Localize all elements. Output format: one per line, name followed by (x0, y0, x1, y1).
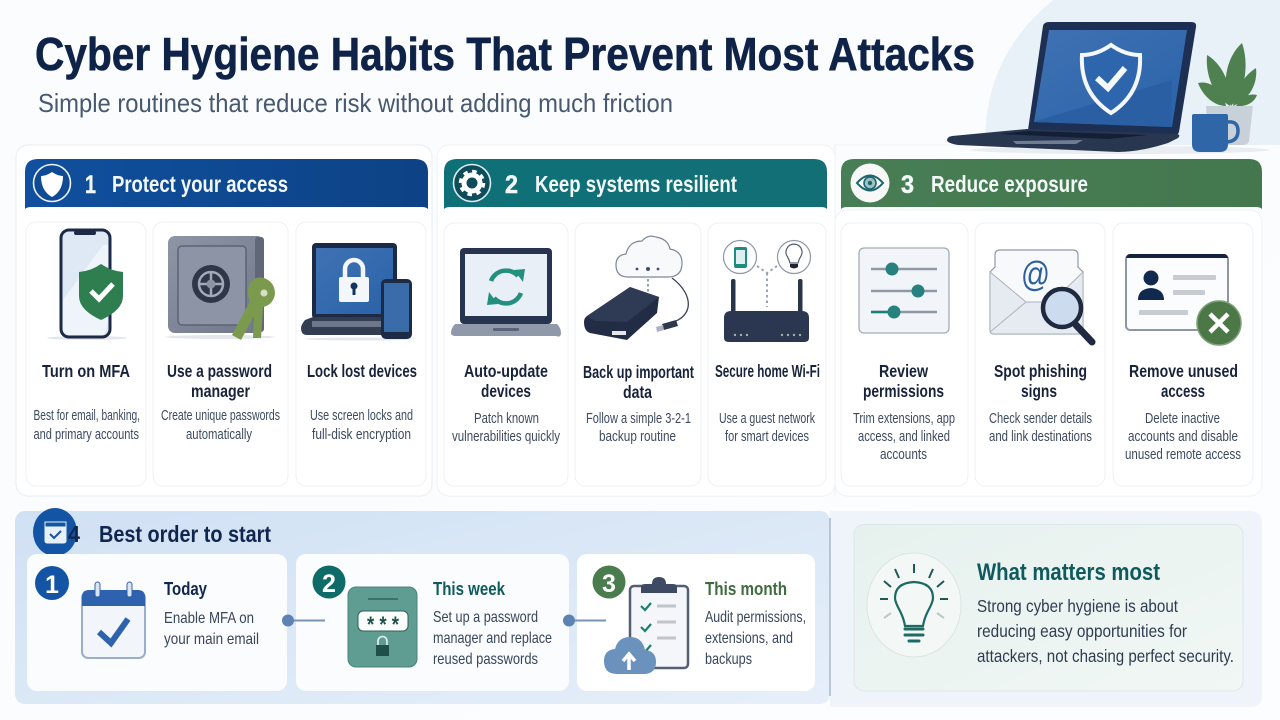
card: remove unused access: access (1161, 381, 1205, 401)
step number 1: 1 (45, 571, 59, 599)
card: back up important data: Follow a simple 3-2-1 (586, 411, 691, 427)
card: back up important data: Back up important (583, 362, 694, 382)
card: spot phishing signs (975, 223, 1105, 486)
card: auto-update devices: Patch known (474, 411, 539, 427)
panel: what matters most: Strong cyber hygiene is about (977, 596, 1178, 616)
step card: this month (577, 554, 815, 691)
step card: this week: This week (433, 579, 506, 599)
card: review permissions: permissions (863, 381, 944, 401)
heading: best order to start: 4 (68, 521, 80, 547)
icon: ID card with remove badge (1126, 254, 1241, 345)
icon: envelope and magnifier (990, 250, 1092, 342)
card: spot phishing signs: Check sender details (989, 411, 1092, 427)
heading: best order to start: Best order to start (99, 521, 271, 547)
step card: today (27, 554, 287, 691)
header: keep systems resilient (444, 159, 827, 209)
card: remove unused access: Delete inactive (1145, 411, 1220, 427)
hero illustration: laptop with shield, mug and plant (947, 22, 1270, 154)
icon: password vault: * * * (367, 612, 399, 637)
icon: lightbulb (867, 553, 961, 657)
card: password manager: Create unique passwords (161, 408, 280, 424)
step card: today: Today (164, 579, 207, 599)
plant (1198, 43, 1257, 106)
card: lock lost devices (296, 222, 426, 486)
icon: calendar check (82, 582, 145, 658)
step card: this week: Set up a password (433, 609, 538, 626)
card: spot phishing signs: Spot phishing (994, 361, 1087, 381)
card: secure home wi-fi: Use a guest network (719, 411, 816, 427)
card: auto-update devices: Auto-update (464, 361, 548, 381)
card: remove unused access (1113, 223, 1253, 486)
card: review permissions: accounts (880, 447, 927, 463)
panel: best order to start (15, 508, 830, 704)
card: turn on MFA: and primary accounts (34, 427, 139, 443)
card: password manager: manager (191, 381, 250, 401)
panel: what matters most: What matters most (977, 559, 1160, 586)
card: back up important data: backup routine (599, 429, 676, 445)
icon: router with phone and bulb (724, 240, 810, 342)
card: turn on MFA (26, 222, 146, 486)
card: turn on MFA: Turn on MFA (42, 361, 130, 381)
card: auto-update devices: devices (481, 381, 531, 401)
step number 3 (592, 566, 626, 598)
card: back up important data: data (623, 382, 652, 402)
step card: this month: extensions, and (705, 630, 793, 647)
icon: clipboard checklist and cloud (604, 577, 688, 674)
panel: reduce exposure (835, 145, 1262, 496)
header: reduce exposure: Reduce exposure (931, 171, 1088, 197)
header: protect your access: 1 (85, 171, 96, 199)
card: remove unused access: Remove unused (1129, 361, 1238, 381)
card: auto-update devices (444, 223, 568, 486)
card: turn on MFA: Best for email, banking, (34, 408, 140, 424)
arrow connector 1 to 2 (282, 614, 325, 626)
panel: what matters most: attackers, not chasing perfect security. (977, 646, 1234, 666)
title: Cyber Hygiene Habits That Prevent Most Attacks (35, 28, 975, 80)
card: review permissions: Review (879, 361, 928, 381)
step card: this month: This month (705, 579, 787, 599)
step number 2 (312, 566, 346, 598)
card: lock lost devices: Use screen locks and (310, 408, 413, 424)
card: spot phishing signs: and link destinations (989, 429, 1092, 445)
icon: calendar badge (33, 508, 77, 556)
panel: keep systems resilient (437, 145, 835, 496)
step card: this month: backups (705, 651, 752, 668)
step card: today: Enable MFA on (164, 610, 254, 627)
step number 2: 2 (322, 570, 336, 598)
card: secure home wi-fi: Secure home Wi-Fi (715, 361, 820, 381)
card: remove unused access: unused remote access (1125, 447, 1241, 463)
header: keep systems resilient: Keep systems resilient (535, 171, 737, 197)
card: review permissions (841, 223, 968, 486)
icon: phone with shield (47, 230, 127, 340)
step number 1 (35, 566, 69, 600)
card: back up important data (575, 223, 701, 486)
header: protect your access (25, 159, 428, 209)
icon: laptop with sync arrows (451, 248, 561, 337)
card: lock lost devices: Lock lost devices (307, 361, 417, 381)
card: password manager: Use a password (167, 361, 272, 381)
card: auto-update devices: vulnerabilities quickly (452, 429, 561, 445)
card: lock lost devices: full-disk encryption (312, 427, 411, 443)
card: password manager (153, 222, 288, 486)
header: keep systems resilient: 2 (505, 171, 518, 199)
card: review permissions: access, and linked (858, 429, 950, 445)
card: review permissions: Trim extensions, app (853, 411, 955, 427)
step card: this week: reused passwords (433, 651, 538, 668)
header: reduce exposure (841, 159, 1262, 209)
card: password manager: automatically (186, 427, 253, 443)
icon: permission sliders (859, 248, 949, 333)
step card: today: your main email (164, 631, 259, 648)
icon: cloud and hard drive (584, 236, 688, 340)
header: protect your access: Protect your access (112, 171, 288, 197)
card: secure home wi-fi (708, 223, 826, 486)
icon: laptop with lock and phone (301, 243, 415, 340)
card: remove unused access: accounts and disable (1128, 429, 1238, 445)
icon: envelope and magnifier: @ (1021, 255, 1050, 294)
panel: what matters most (830, 511, 1262, 707)
step card: this month: Audit permissions, (705, 609, 806, 626)
subtitle: Simple routines that reduce risk without adding much friction (38, 88, 673, 118)
card: secure home wi-fi: for smart devices (725, 429, 809, 445)
panel: what matters most: reducing easy opportunities for (977, 621, 1187, 641)
step number 3: 3 (602, 570, 616, 598)
arrow connector 2 to 3 (563, 614, 606, 626)
icon: safe and keys (165, 236, 275, 340)
icon: password vault (348, 587, 417, 667)
panel: protect your access (16, 145, 432, 496)
header: reduce exposure: 3 (901, 171, 914, 199)
step card: this week: manager and replace (433, 630, 552, 647)
card: spot phishing signs: signs (1021, 381, 1057, 401)
step card: this week (296, 554, 569, 691)
